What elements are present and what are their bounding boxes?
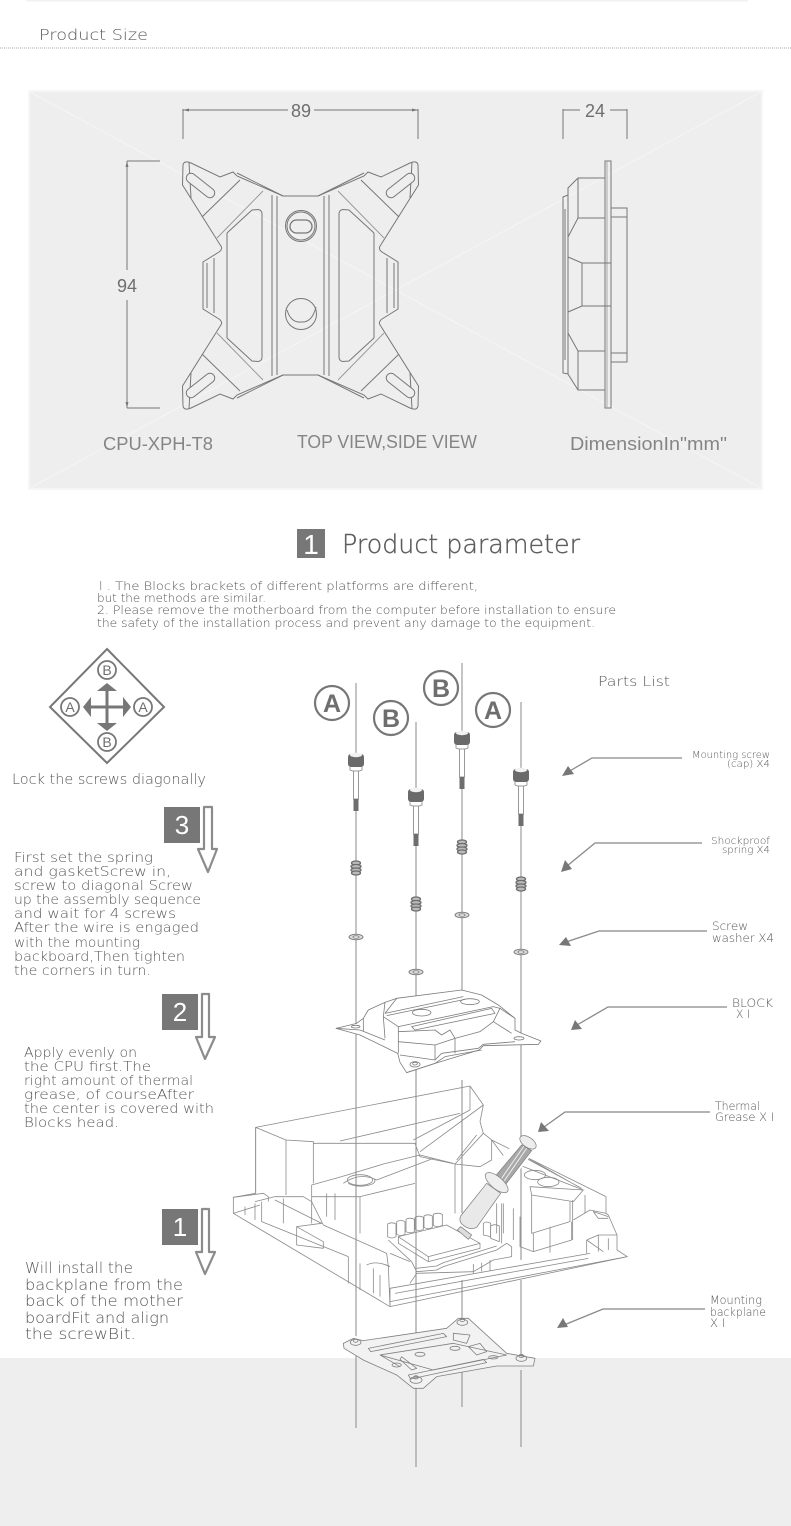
step 3 badge: 3 [175, 810, 189, 840]
springs [351, 840, 526, 911]
top sliver bar [26, 0, 748, 2]
step 3 text: screw to diagonal Screw [14, 878, 193, 894]
motherboard [233, 1086, 627, 1307]
callout: thermal grease: Grease X I [715, 1110, 774, 1124]
step 3 text: After the wire is engaged [14, 920, 199, 936]
step 3 text: First set the spring [14, 850, 153, 866]
mounting backplate [343, 1318, 535, 1388]
icon: diagonal lock diagram: B [102, 662, 112, 678]
callout: shockproof spring: spring X4 [722, 845, 770, 856]
heading: Product parameter: Product parameter [342, 530, 580, 560]
drawing: block top view [182, 162, 418, 409]
callout: screw washer: washer X4 [712, 931, 774, 945]
step 3 text: and gasketScrew in, [14, 864, 171, 880]
letter circles A B B A [315, 671, 510, 735]
water block [336, 990, 541, 1073]
step 1 badge: 1 [173, 1212, 187, 1242]
heading: Product Size: Product Size [39, 26, 148, 44]
step 2 text: right amount of thermal [24, 1073, 193, 1089]
dimension: depth 24 [563, 101, 627, 139]
icon: diagonal lock diagram: A [65, 699, 75, 715]
step 1 text: the screwBit. [25, 1325, 136, 1343]
step 3 badge [164, 807, 217, 872]
callout: mounting backplane: backplane [710, 1305, 766, 1319]
callout: mounting screw: (cap) X4 [727, 759, 770, 770]
callout: mounting backplane: X I [710, 1316, 725, 1330]
step 3 text [14, 850, 201, 979]
step 3 text: with the mounting [14, 935, 140, 951]
dimension: height 94: 94 [117, 276, 137, 296]
icon: diagonal lock diagram: B [102, 734, 112, 750]
step 2 badge: 2 [173, 997, 187, 1027]
callout: screw washer [559, 919, 774, 946]
step 2 text: the CPU first.The [24, 1059, 151, 1075]
callout: screw washer: Screw [712, 919, 748, 933]
callout: thermal grease [538, 1099, 774, 1132]
dimension: depth 24: 24 [585, 101, 605, 121]
letter circles A B B A: B [382, 705, 400, 733]
step 1 text: back of the mother [25, 1292, 184, 1310]
callout: mounting backplane [557, 1293, 766, 1330]
step 3 text: backboard,Then tighten [14, 949, 185, 965]
callout: mounting screw: Mounting screw [692, 750, 770, 761]
label: model: CPU-XPH-T8 [103, 434, 213, 454]
thermal grease syringe [457, 1133, 539, 1239]
screws [348, 731, 529, 846]
dimension: height 94 [117, 161, 160, 408]
step 2 text: Apply evenly on [24, 1045, 137, 1061]
dimension: width 89: 89 [291, 101, 311, 121]
step 1 text: boardFit and align [25, 1309, 169, 1327]
label: views: TOP VIEW,SIDE VIEW [297, 432, 477, 452]
letter circles A B B A: B [432, 675, 450, 703]
step 3 text: up the assembly sequence [14, 892, 201, 908]
heading: Product parameter: 1 [303, 529, 319, 560]
washers [349, 912, 528, 975]
callout: block: X I [736, 1007, 750, 1021]
step 1 badge [162, 1209, 215, 1274]
step 3 text: the corners in turn. [14, 963, 151, 979]
notes text block [97, 579, 616, 630]
drawing: block side view [563, 161, 627, 408]
notes text block: the safety of the installation process and prevent any damage to the equipment. [97, 616, 595, 630]
panel: product dimensions [28, 90, 763, 490]
label: Parts List: Parts List [598, 674, 670, 690]
callout: mounting backplane: Mounting [710, 1293, 762, 1307]
letter circles A B B A: A [484, 697, 502, 725]
callout: mounting screw [562, 750, 770, 776]
letter circles A B B A: A [323, 690, 341, 718]
step 2 text: grease, of courseAfter [24, 1087, 194, 1103]
notes text block: l . The Blocks brackets of different platforms are different, [99, 579, 478, 593]
caption: lock diagonally: Lock the screws diagonally [12, 772, 206, 788]
callout: shockproof spring [561, 836, 770, 872]
notes text block: 2. Please remove the motherboard from the computer before installation to ensure [97, 603, 616, 617]
icon: diagonal lock diagram: A [138, 699, 148, 715]
bottom grey band [0, 1358, 791, 1526]
step 2 text [24, 1045, 214, 1131]
step 3 text: and wait for 4 screws [14, 906, 176, 922]
step 1 text: backplane from the [25, 1276, 183, 1294]
step 2 badge [162, 994, 215, 1059]
callout: shockproof spring: Shockproof [711, 836, 770, 847]
step 2 text: Blocks head. [24, 1115, 119, 1131]
callout: thermal grease: Thermal [715, 1099, 760, 1113]
step 2 text: the center is covered with [24, 1101, 214, 1117]
callout: block: BLOCK [732, 996, 773, 1010]
guide rods [356, 663, 521, 1467]
icon: diagonal lock diagram [50, 649, 164, 763]
dimension: width 89 [183, 101, 418, 139]
label: units: DimensionIn"mm" [570, 434, 727, 454]
step 1 text: Will install the [25, 1259, 133, 1277]
callout: block [571, 996, 773, 1030]
notes text block: but the methods are similar. [97, 591, 266, 605]
step 1 text [25, 1259, 184, 1343]
